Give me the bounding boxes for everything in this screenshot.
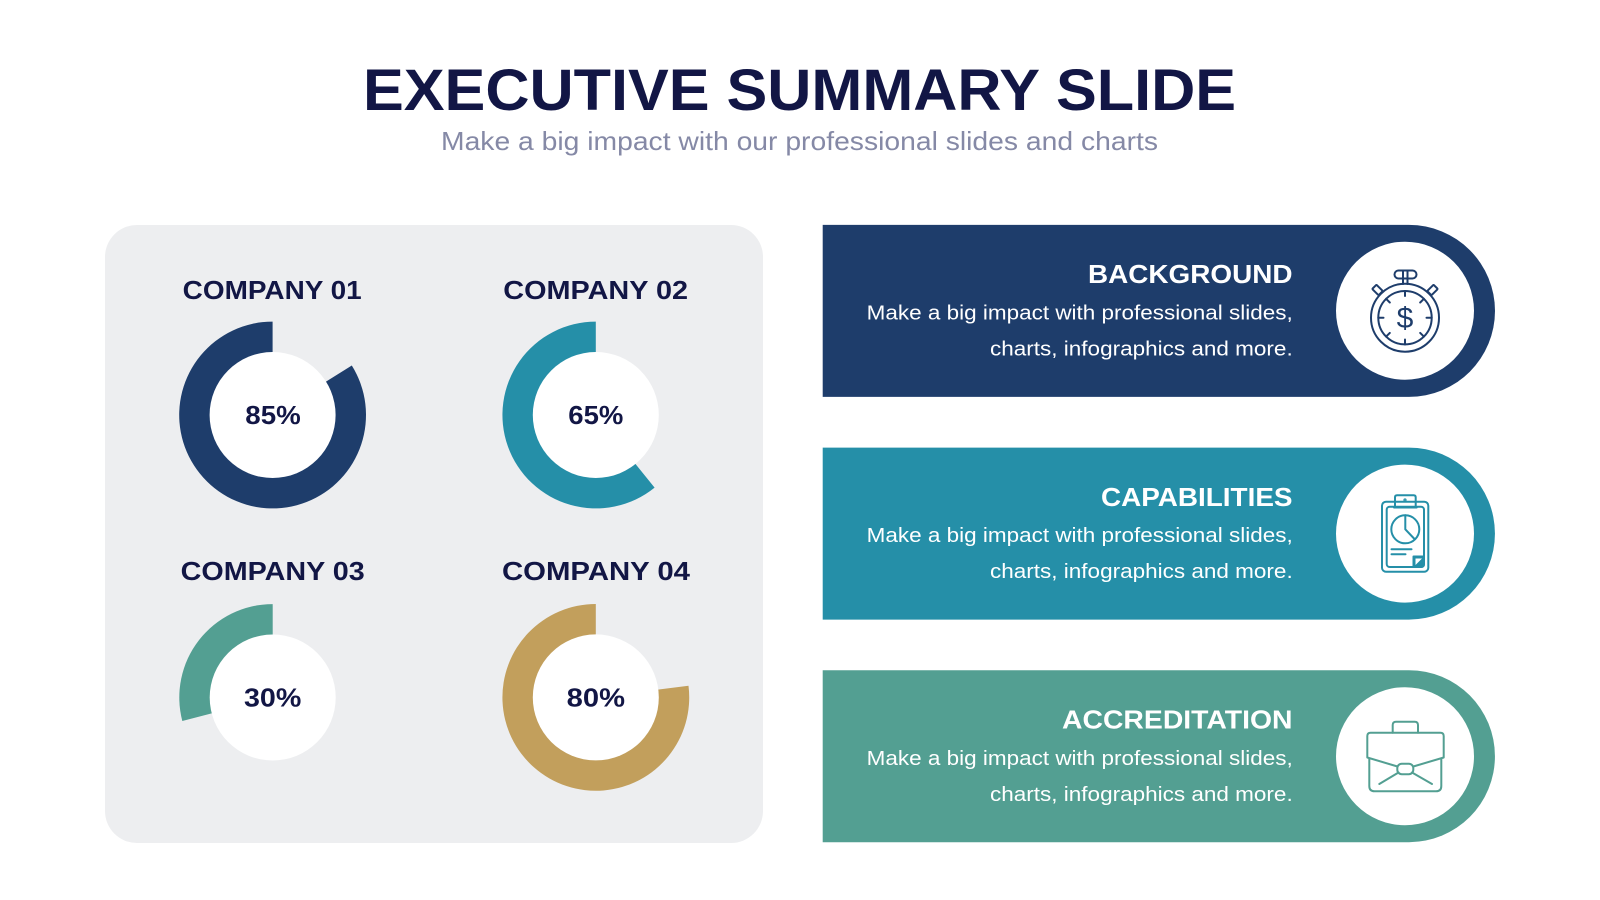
panel: company donut charts xyxy=(105,225,763,843)
icon: clipboard with pie chart xyxy=(1382,495,1428,572)
text: background description: Make a big impact with professional slides, xyxy=(867,303,1293,325)
chart: company 02: COMPANY 02 xyxy=(503,275,688,305)
chart: company 03: 30% xyxy=(244,682,301,712)
text: accreditation description: charts, infographics and more. xyxy=(990,784,1293,806)
title: EXECUTIVE SUMMARY SLIDE xyxy=(363,58,1236,123)
panel: accreditation xyxy=(823,670,1495,842)
chart: company 02 xyxy=(502,275,688,508)
text: capabilities description: charts, infographics and more. xyxy=(990,561,1293,583)
heading: background: BACKGROUND xyxy=(1088,259,1292,289)
text: background description: charts, infographics and more. xyxy=(990,339,1293,361)
chart: company 03 xyxy=(179,556,365,760)
chart: company 04: COMPANY 04 xyxy=(502,556,691,586)
icon: stopwatch with dollar sign: $ xyxy=(1397,302,1414,335)
chart: company 01 xyxy=(179,275,366,508)
subtitle: Make a big impact with our professional slides and charts xyxy=(441,126,1158,156)
chart: company 01: COMPANY 01 xyxy=(183,275,362,305)
chart: company 03: COMPANY 03 xyxy=(181,556,365,586)
panel: capabilities xyxy=(823,448,1495,620)
text: accreditation description: Make a big impact with professional slides, xyxy=(867,748,1293,770)
chart: company 01: 85% xyxy=(245,400,301,430)
chart: company 02: 65% xyxy=(568,400,623,430)
icon: stopwatch with dollar sign xyxy=(1371,270,1439,352)
chart: company 04: 80% xyxy=(567,682,625,712)
icon: briefcase xyxy=(1367,722,1444,791)
text: background description xyxy=(867,303,1293,361)
text: capabilities description: Make a big impact with professional slides, xyxy=(867,525,1293,547)
text: capabilities description xyxy=(867,525,1293,583)
heading: accreditation: ACCREDITATION xyxy=(1062,704,1292,734)
panel: background xyxy=(823,225,1495,397)
chart: company 04 xyxy=(502,556,691,791)
text: accreditation description xyxy=(867,748,1293,806)
heading: capabilities: CAPABILITIES xyxy=(1101,482,1292,512)
